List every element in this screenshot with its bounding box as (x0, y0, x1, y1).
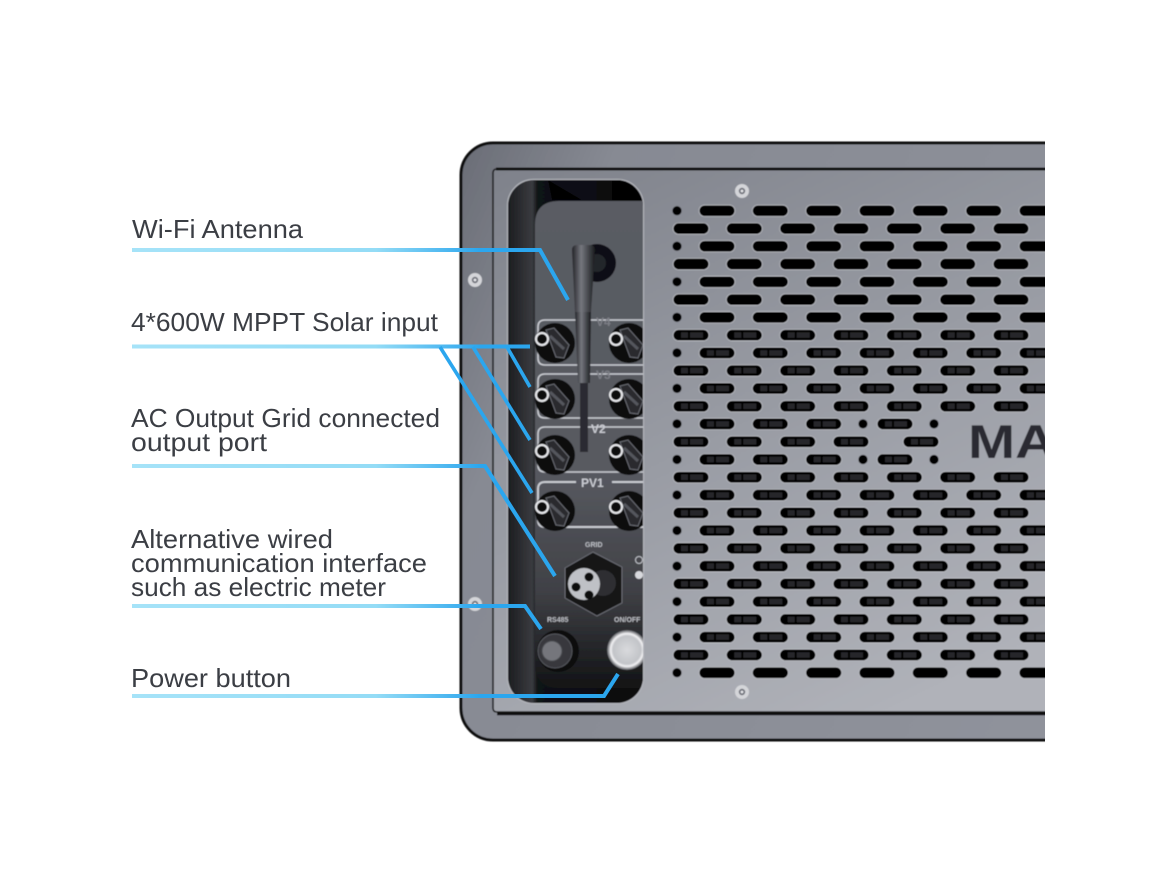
PV connectors (535, 323, 649, 531)
label: Wi-Fi Antenna: Wi-Fi Antenna (132, 214, 304, 244)
brand logo: MA (968, 415, 1056, 468)
label: solar input: 4*600W MPPT Solar input (131, 307, 439, 337)
ON/OFF power button (607, 617, 647, 670)
ventilation slots (672, 205, 1055, 678)
inverter device panel (458, 140, 1045, 742)
label: wired interface: communication interface (131, 548, 427, 578)
leader line: Wi-Fi Antenna (132, 250, 568, 300)
Wi-Fi antenna (572, 244, 616, 452)
label: wired interface: Alternative wired (131, 524, 333, 554)
outer casing (458, 140, 1045, 742)
PV connector frames (538, 320, 643, 527)
label: Power button: Power button (131, 663, 291, 693)
PV labels: V3 (596, 368, 611, 382)
RS485 port: RS485 (547, 617, 569, 624)
label: wired interface (131, 524, 427, 602)
label: wired interface: such as electric meter (131, 572, 386, 602)
leader line: AC output (132, 466, 555, 576)
RS485 port (537, 617, 579, 672)
leader line: wired interface (132, 606, 541, 629)
GRID connector (565, 542, 643, 616)
recess outline (508, 180, 644, 704)
leader lines: solar input (132, 346, 532, 493)
ON/OFF power button: ON/OFF (614, 617, 641, 624)
PV labels: PV1 (581, 476, 604, 490)
label: AC output: AC Output Grid connected (131, 403, 440, 433)
inner face plate (492, 167, 1045, 716)
GRID connector: GRID (585, 542, 602, 549)
label: AC output second line: output port (131, 427, 268, 457)
leader line: Power button (132, 674, 618, 696)
mounting screws (468, 184, 749, 699)
PV labels: V2 (591, 422, 606, 436)
PV labels: V4 (596, 315, 611, 329)
PV labels (581, 315, 611, 490)
connector recess (508, 180, 653, 703)
